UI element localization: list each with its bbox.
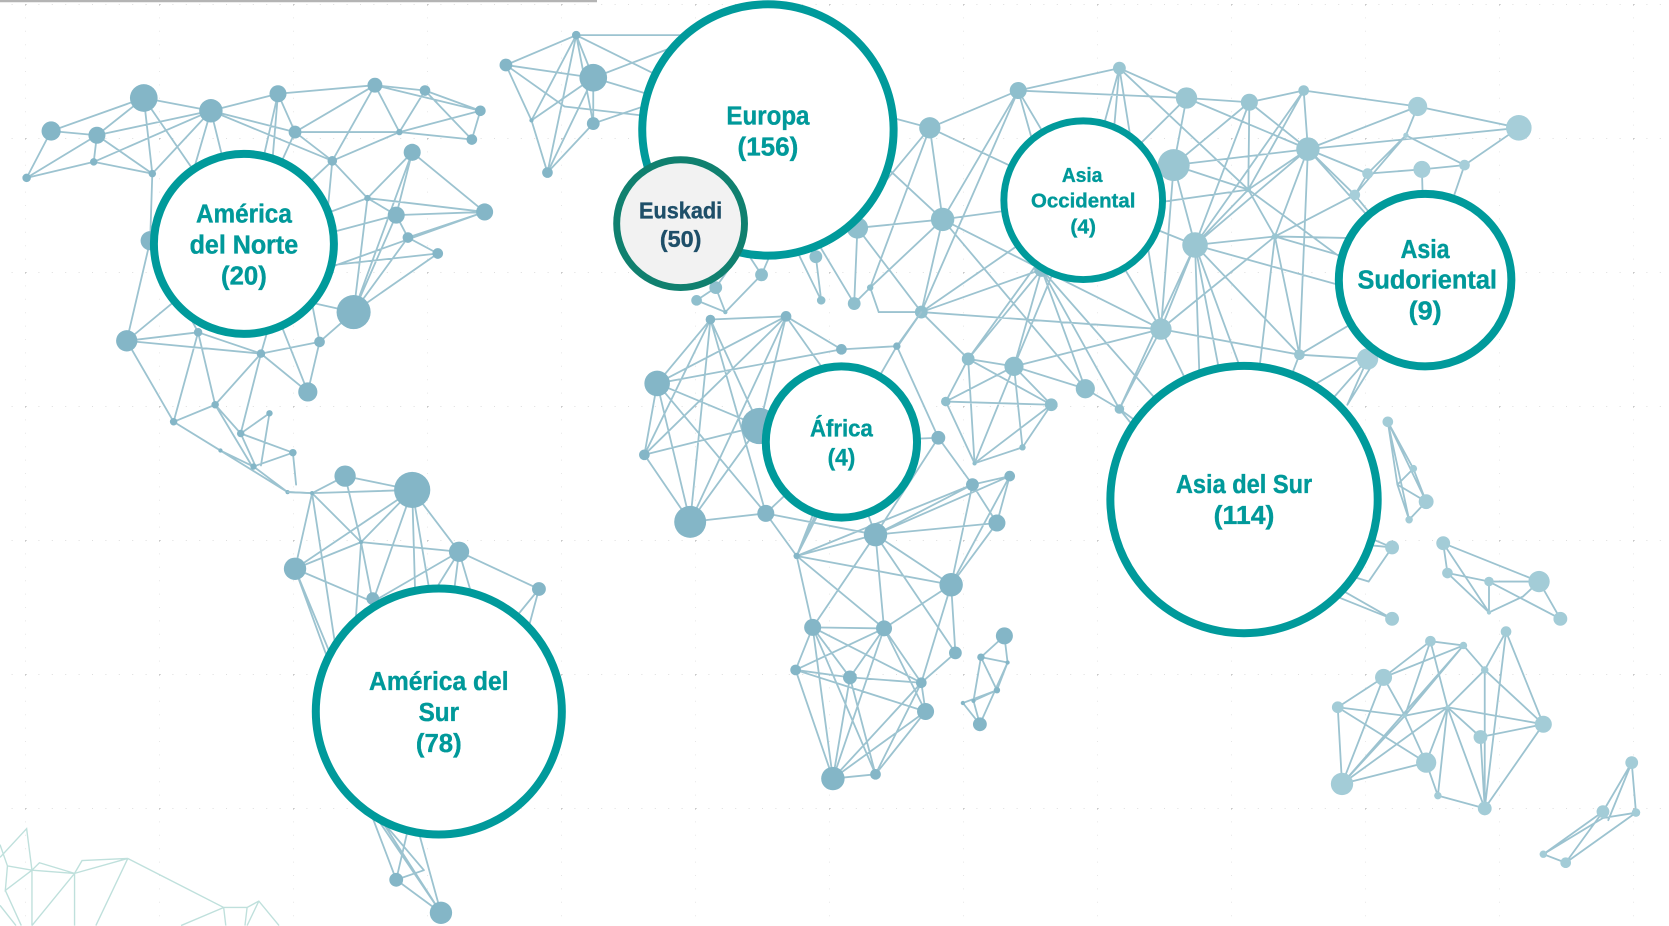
bubble: América del Norte (20): América [196,201,293,229]
bubble: Europa (156) [642,4,894,256]
bubble: Asia Sudoriental (9): Asia [1401,236,1450,264]
bubble: Asia del Sur (114): Asia del Sur [1176,471,1312,499]
bubble: América del Sur (78) [316,588,562,835]
bubble: América del Sur (78): Sur [419,699,459,727]
bubble: América del Sur (78): (78) [416,730,462,758]
bubble: Asia Occidental (4) [1004,121,1163,280]
network: North and Central America [22,78,493,494]
bubble: América del Norte (20): del Norte [190,231,298,259]
bubble: Asia Sudoriental (9): Sudoriental [1357,267,1497,295]
bubble: América del Norte (20): (20) [221,262,267,290]
bubble: Asia del Sur (114) [1110,366,1378,633]
faded network fragment, bottom left [0,829,279,926]
bubble: Asia del Sur (114): (114) [1214,502,1274,530]
network: South America [284,465,546,924]
bubble: Asia Occidental (4): Asia [1062,165,1103,187]
bubble: Euskadi (50): (50) [660,226,701,252]
network: Australia and New Zealand [1331,626,1640,868]
network: Europe and Asia [681,62,1532,500]
bubble: Europa (156): Europa [726,103,810,131]
bubble: Asia Sudoriental (9): (9) [1409,298,1442,326]
bubble: Euskadi (50) [617,160,744,288]
bubble: Asia Sudoriental (9) [1339,194,1511,366]
bubble: Asia Occidental (4): Occidental [1031,191,1135,213]
bubble: América del Sur (78): América del [369,668,509,696]
bubble: Asia Occidental (4): (4) [1070,216,1096,238]
bubble: Europa (156): (156) [738,134,798,162]
bubble: África (4): África [810,415,873,443]
network: Greenland [500,11,768,178]
network: Africa [639,311,1015,790]
bubble: América del Norte (20) [154,154,334,334]
bubble: África (4): (4) [828,444,855,471]
bubble: África (4) [766,366,917,518]
network: Southeast Asia islands [1244,416,1567,626]
bubble: Euskadi (50): Euskadi [639,197,722,223]
